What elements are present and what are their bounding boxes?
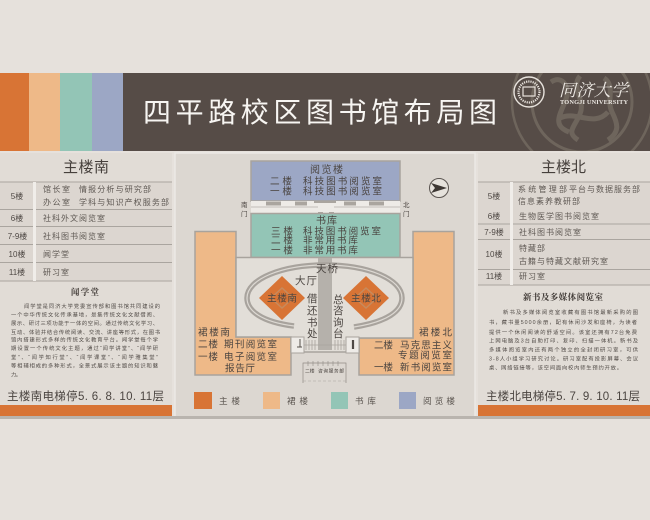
stacks building: 非常用书库 xyxy=(303,244,358,256)
reading building: 二楼 xyxy=(270,176,292,188)
text block: new books: 书，藏书量5000余册，配有休闲沙发和座椅，为读者 xyxy=(489,318,637,326)
podium south xyxy=(195,232,291,375)
circulation desk label xyxy=(307,293,318,340)
text block: wenxuetang: 馆内搭建形式多样的传统文化教育平台。闻学堂每个学 xyxy=(11,336,158,344)
floor table: south: 办公室 xyxy=(43,197,70,207)
information desk label: 总 xyxy=(333,293,344,306)
legend xyxy=(194,392,455,409)
floor table: north: 6楼 xyxy=(488,211,500,221)
podium north: 裙楼北 xyxy=(419,326,452,338)
text block: new books: 3-8人小组学习研究讨论。研习室配有投影屏幕、会议 xyxy=(489,354,639,362)
legend: 裙楼 xyxy=(287,395,308,406)
podium south: 一楼 xyxy=(198,351,218,363)
floor table: south: 闻学堂 xyxy=(43,249,69,259)
header banner xyxy=(0,73,650,151)
podium south: 裙楼南 xyxy=(198,326,230,338)
legend: 主楼 xyxy=(219,395,240,406)
university seal xyxy=(514,77,544,107)
floor table: south: 馆长室 xyxy=(43,184,70,194)
text block: new books: 上网电脑及3台自助打印、复印、扫描一体机。新书及 xyxy=(489,336,639,344)
floor table: north xyxy=(478,182,650,285)
text block: wenxuetang: 堂”、“闻学知行堂”、“闻学课堂”、“闻学雅集堂” xyxy=(11,353,158,361)
university name: 同济大学 xyxy=(559,81,630,100)
north gate label xyxy=(403,201,410,218)
south gate label xyxy=(241,200,248,218)
lobby label: 大厅 xyxy=(295,274,317,287)
text block: wenxuetang: 互动、体验并结合传统阅读、交流、讲座等形式，在图书 xyxy=(11,328,161,336)
floor table: south: 6楼 xyxy=(11,213,23,223)
floor table: south xyxy=(0,182,172,281)
front service area: 二楼 xyxy=(305,368,315,374)
legend: 书库 xyxy=(355,395,376,406)
text block: wenxuetang: 等相辅相成的多种形式，全景式展示该主题的知识和魅 xyxy=(11,362,159,370)
skybridge xyxy=(318,258,332,350)
stacks building: 一楼 xyxy=(271,244,293,256)
text block: new books: 多媒体阅览室内还有两个独立的全封闭研习室，可供 xyxy=(489,346,639,354)
south gate label: 南 xyxy=(241,200,248,209)
podium north: 新书阅览室 xyxy=(400,362,452,374)
heading: south: 主楼南 xyxy=(63,159,109,176)
panel: floor plan xyxy=(175,153,475,417)
floor table: north: 11楼 xyxy=(486,271,502,281)
heading: north: 主楼北 xyxy=(541,159,586,176)
floor table: north: 信息素养教研部 xyxy=(518,196,580,206)
stacks building: 三楼 xyxy=(271,226,293,238)
front service area xyxy=(303,361,346,383)
floor table: north: 社科图书阅览室 xyxy=(519,227,581,237)
stairs and entrance xyxy=(291,337,359,353)
floor table: south: 社科外文阅览室 xyxy=(43,213,105,223)
text block: new books: 提供一个休闲阅读的舒适空间。该室还拥有72台免费 xyxy=(489,328,637,336)
floor table: south: 7-9楼 xyxy=(8,231,27,241)
podium south: 二楼 xyxy=(198,338,218,350)
text block: wenxuetang: 展示、研讨三项功能于一体的空间。通过传统文化学习、 xyxy=(11,319,158,327)
main building north diamond xyxy=(343,276,389,320)
orange footer bar: north xyxy=(478,405,650,416)
floor table: south: 10楼 xyxy=(9,249,25,259)
podium north: 一楼 xyxy=(374,362,393,374)
text block: wenxuetang: 闻学堂是同济大学党委宣传部和图书馆共同建设的 xyxy=(24,302,160,310)
bottom shadow strip xyxy=(0,416,650,419)
title: 四平路校区图书馆布局图 xyxy=(143,97,497,128)
text block: wenxuetang: 期设置一个传统文化主题，通过“闻学讲堂”、“闻学研 xyxy=(11,344,159,352)
lobby courtyard xyxy=(236,258,413,352)
text block: new books: 新书及多媒体阅览室收藏有图书馆最新采购的图 xyxy=(503,308,638,316)
podium south: 报告厅 xyxy=(225,362,255,374)
podium south: 电子阅览室 xyxy=(224,351,277,363)
floor table: south: 11楼 xyxy=(9,267,25,277)
legend: 阅览楼 xyxy=(423,395,455,406)
text block: wenxuetang: 闻学堂 xyxy=(71,287,99,297)
text block: wenxuetang xyxy=(11,287,161,378)
main building north diamond: 主楼北 xyxy=(351,292,381,304)
front service area: 咨询服务部 xyxy=(318,368,344,374)
floor table: north: 平台与数据服务部 xyxy=(569,184,640,194)
curved walkway xyxy=(247,265,402,327)
north gate label: 门 xyxy=(403,209,410,218)
circulation desk label: 借 xyxy=(307,293,318,305)
text block: new books: 桌、网络链接等，该空间面向校内师生预约开放。 xyxy=(489,364,622,372)
main building south diamond xyxy=(259,276,305,320)
stacks building: 科技图书阅览室 xyxy=(303,226,381,238)
stacks building: 二楼 xyxy=(271,234,293,246)
south gate label: 门 xyxy=(241,209,248,218)
circulation desk label: 还 xyxy=(307,305,318,317)
orange footer bar: south xyxy=(0,405,172,416)
floor table: south: 5楼 xyxy=(11,191,23,201)
stacks building: 非常用书库 xyxy=(303,234,358,246)
podium north: 专题阅览室 xyxy=(398,350,452,362)
skybridge label: 天桥 xyxy=(316,263,338,275)
reading building xyxy=(251,161,400,201)
north gate label: 北 xyxy=(403,201,410,209)
podium south: 期刊阅览室 xyxy=(224,338,277,350)
elevator note: south: 主楼南电梯停5. 6. 8. 10. 11层 xyxy=(7,389,164,403)
text block: wenxuetang: 一个中华传统文化传承基地，是集传统文化文献借阅、 xyxy=(11,310,158,318)
podium north: 二楼 xyxy=(374,340,393,352)
text block: new books xyxy=(489,292,639,372)
information desk label xyxy=(333,293,344,340)
elevator note: north: 主楼北电梯停5. 7. 9. 10. 11层 xyxy=(486,389,640,403)
circulation desk label: 书 xyxy=(307,317,318,329)
circulation desk label: 处 xyxy=(307,328,318,340)
floor table: south: 学科与知识产权服务部 xyxy=(79,197,169,207)
main building south diamond: 主楼南 xyxy=(267,292,297,304)
panel: main building north xyxy=(478,153,650,417)
reading building: 一楼 xyxy=(270,186,292,198)
watermark seal xyxy=(510,73,650,151)
floor table: north: 7-9楼 xyxy=(484,227,504,237)
corridor between buildings xyxy=(251,201,400,214)
floor table: north: 研习室 xyxy=(519,271,545,281)
compass arrow xyxy=(430,178,448,198)
floor table: north: 特藏部 xyxy=(519,243,545,253)
panel: main building south xyxy=(0,153,172,417)
information desk label: 咨 xyxy=(333,304,344,317)
podium north: 马克思主义 xyxy=(400,340,452,352)
text block: wenxuetang: 力。 xyxy=(11,370,21,378)
text block: new books: 新书及多媒体阅览室 xyxy=(523,292,603,302)
podium north xyxy=(359,232,454,375)
floor table: north: 系统管理部 xyxy=(518,184,567,194)
stacks building: 书库 xyxy=(316,214,337,227)
floor table: north: 古籍与特藏文献研究室 xyxy=(519,256,608,266)
university name: TONGJI UNIVERSITY xyxy=(560,99,628,106)
floor table: north: 10楼 xyxy=(486,249,502,259)
floor table: south: 研习室 xyxy=(43,267,69,277)
information desk label: 询 xyxy=(333,316,344,329)
information desk label: 台 xyxy=(333,327,344,340)
reading building: 科技图书阅览室 xyxy=(303,176,382,188)
floor table: south: 情报分析与研究部 xyxy=(79,184,151,194)
reading building: 科技图书阅览室 xyxy=(303,186,382,198)
floor table: north: 5楼 xyxy=(488,191,500,201)
reading building: 阅览楼 xyxy=(310,163,343,176)
floor table: north: 生物医学图书阅览室 xyxy=(519,211,599,221)
floor table: south: 社科图书阅览室 xyxy=(43,231,105,241)
stacks building xyxy=(251,214,400,258)
